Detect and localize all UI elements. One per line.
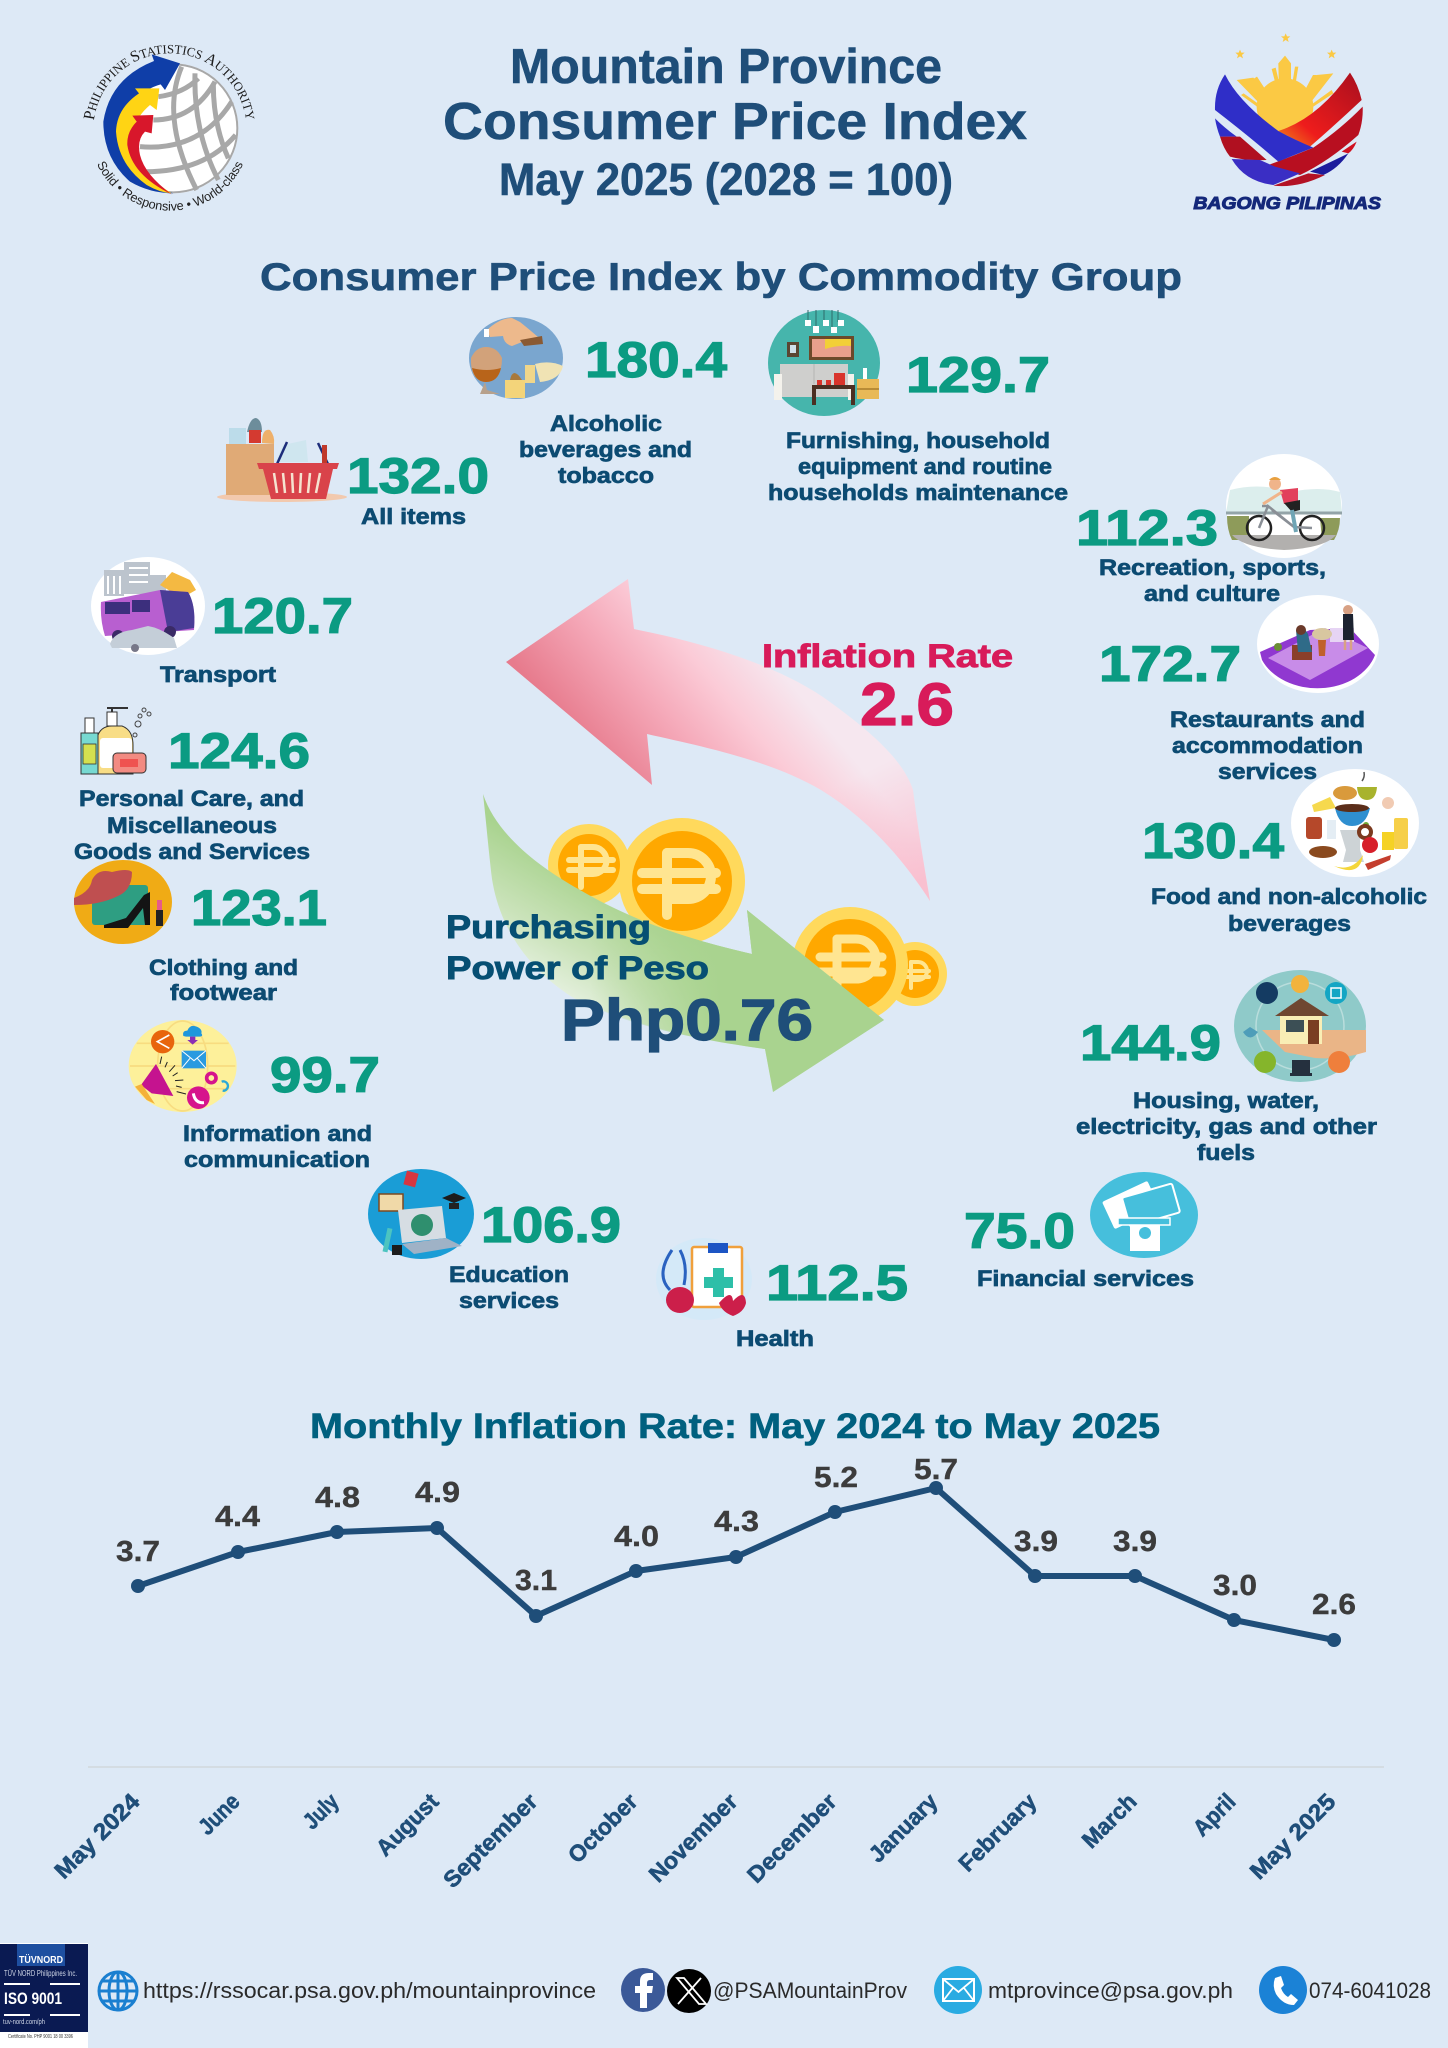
month axis labels: May 2024: [49, 1788, 145, 1884]
value: 130.4: [1142, 813, 1284, 869]
footer: email: [934, 1966, 1233, 2014]
month axis labels: October: [563, 1788, 643, 1868]
item: transport: [91, 557, 353, 687]
label: [183, 1121, 372, 1172]
section heading: monthly inflation: Monthly Inflation Rate: May 2024 to May 2025: [310, 1407, 1160, 1446]
value: 120.7: [212, 588, 353, 644]
icon: telephone: [1259, 1966, 1307, 2014]
month axis labels: May 2025: [1244, 1788, 1341, 1884]
footer: website: https://rssocar.psa.gov.ph/mountainprovince: [143, 1978, 596, 2003]
value: 144.9: [1080, 1015, 1221, 1071]
label: beverages: [1228, 911, 1351, 936]
logo: Philippine Statistics Authority: PHILIPPINE STATISTICS AUTHORITY: [84, 44, 254, 120]
arrow: inflation (pink): [506, 579, 930, 901]
icon: cyclist: [1226, 454, 1342, 558]
label: Alcoholic: [550, 411, 662, 436]
data labels: 4.4: [215, 1501, 260, 1533]
badge: ISO 9001 certification: Certificate No. PHP 9001 18 00 3396: [8, 2034, 73, 2040]
icon: clipboard, apple and heart: [656, 1238, 752, 1320]
item: furnishing: [768, 310, 1068, 505]
data labels: 4.9: [415, 1477, 460, 1509]
month axis labels: April: [1188, 1788, 1241, 1841]
item: clothing: [74, 860, 327, 1005]
label: Recreation, sports,: [1099, 555, 1326, 580]
label: electricity, gas and other: [1076, 1114, 1377, 1139]
month axis labels: November: [644, 1788, 743, 1887]
label: [1170, 707, 1365, 784]
label: Financial services: [977, 1266, 1194, 1291]
purchasing power of peso: Purchasing: [446, 909, 651, 945]
item: restaurants: [1099, 595, 1379, 784]
icon: grocery basket: [217, 418, 347, 502]
label: Miscellaneous: [107, 813, 277, 838]
icon: hat, bag and heel: [74, 860, 172, 944]
inflation rate: Inflation Rate: [762, 638, 1013, 674]
title: Mountain Province: [510, 40, 942, 94]
badge: ISO 9001 certification: tuv-nord.com/ph: [3, 2019, 45, 2026]
label: Food and non-alcoholic: [1151, 884, 1427, 909]
icon: facebook: [621, 1968, 665, 2012]
coins: large right: [792, 907, 908, 1023]
month axis labels: June: [193, 1788, 245, 1840]
logo: Bagong Pilipinas: BAGONG PILIPINAS: [1193, 193, 1381, 213]
icon: bus and car: [91, 557, 205, 655]
data labels: 5.7: [914, 1454, 958, 1486]
item: food: [1142, 769, 1427, 936]
footer: phone: [1259, 1966, 1431, 2014]
icon: restaurant on phone: [1257, 595, 1379, 693]
icon: house on hand: [1234, 970, 1366, 1082]
inflation rate: 2.6: [860, 671, 954, 738]
title: Consumer Price Index: [443, 93, 1027, 151]
icon: envelope: [934, 1966, 982, 2014]
label: Furnishing, household: [786, 428, 1050, 453]
icon: laptop and graduation: [368, 1169, 474, 1259]
coins: small left: [548, 824, 630, 906]
data labels: 3.0: [1213, 1570, 1257, 1602]
value: 99.7: [270, 1047, 380, 1103]
label: Transport: [160, 662, 277, 687]
label: footwear: [170, 980, 277, 1005]
purchasing power of peso: Power of Peso: [446, 950, 709, 986]
label: and culture: [1144, 581, 1280, 606]
value: 75.0: [964, 1203, 1075, 1259]
icon: food circle: [1291, 769, 1419, 877]
label: [1076, 1088, 1377, 1165]
item: personal care: [74, 708, 310, 864]
data labels: 3.1: [515, 1565, 557, 1597]
data labels: 3.9: [1113, 1526, 1157, 1558]
label: Education: [449, 1262, 569, 1287]
value: 180.4: [585, 332, 727, 388]
value: 124.6: [168, 723, 310, 779]
icon: living room: [768, 310, 880, 416]
icon: globe: [99, 1972, 137, 2010]
label: [149, 955, 298, 1005]
footer: website: [99, 1972, 596, 2010]
label: All items: [361, 504, 466, 529]
data labels: 3.9: [1014, 1526, 1058, 1558]
section heading: commodity group: Consumer Price Index by Commodity Group: [260, 256, 1182, 299]
item: alcoholic beverages and tobacco: [469, 317, 727, 488]
month axis labels: January: [863, 1788, 943, 1867]
label: services: [1218, 759, 1317, 784]
label: [449, 1262, 569, 1313]
item: education: [368, 1169, 621, 1313]
data labels: [116, 1454, 1356, 1621]
value: 129.7: [906, 347, 1050, 403]
icon: communication symbols: [129, 1020, 237, 1112]
month axis labels: March: [1076, 1788, 1142, 1853]
month axis labels: February: [953, 1788, 1042, 1877]
data labels: 2.6: [1312, 1589, 1356, 1621]
label: fuels: [1197, 1140, 1255, 1165]
data labels: 4.3: [714, 1506, 759, 1538]
coins: large left: [619, 818, 745, 944]
footer: social media: [621, 1968, 907, 2013]
label: Housing, water,: [1133, 1088, 1319, 1113]
purchasing power of peso: Php0.76: [561, 988, 813, 1053]
icon: soap and bottles: [81, 708, 151, 774]
logo: Bagong Pilipinas: [1193, 33, 1381, 213]
data labels: 4.8: [315, 1482, 360, 1514]
badge: ISO 9001 certification: [0, 1943, 88, 2048]
value: 123.1: [191, 880, 327, 936]
data labels: 5.2: [814, 1462, 858, 1494]
inflation rate: [762, 638, 1013, 738]
label: accommodation: [1172, 733, 1363, 758]
item: information and communication: [129, 1020, 380, 1172]
footer: social media: @PSAMountainProv: [713, 1978, 907, 2003]
label: [1099, 555, 1326, 606]
label: households maintenance: [768, 480, 1068, 505]
title: May 2025 (2028 = 100): [499, 154, 953, 205]
label: [768, 428, 1068, 505]
data line: [138, 1488, 1334, 1640]
item: financial services: [964, 1172, 1198, 1291]
label: Personal Care, and: [79, 786, 304, 811]
label: Restaurants and: [1170, 707, 1365, 732]
label: [1151, 884, 1427, 936]
data labels: 3.7: [116, 1536, 160, 1568]
label: Information and: [183, 1121, 372, 1146]
value: 112.3: [1076, 500, 1218, 556]
purchasing power of peso: [446, 909, 813, 1053]
item: housing: [1076, 970, 1377, 1165]
logo: Philippine Statistics Authority: [84, 44, 254, 211]
data labels: 4.0: [614, 1521, 659, 1553]
arrow: purchasing power (green): [483, 794, 884, 1092]
badge: ISO 9001 certification: TÜV NORD Philippines Inc.: [4, 1969, 77, 1978]
label: services: [459, 1288, 559, 1313]
line chart: monthly inflation rate: [49, 1454, 1384, 1893]
month axis labels: [49, 1788, 1341, 1893]
footer: email: mtprovince@psa.gov.ph: [988, 1978, 1233, 2003]
label: [519, 411, 692, 488]
coins: small right: [883, 942, 947, 1006]
item: health: [656, 1238, 908, 1351]
label: tobacco: [558, 463, 654, 488]
month axis labels: September: [438, 1788, 543, 1893]
item: recreation: [1076, 454, 1342, 606]
badge: ISO 9001 certification: ISO 9001: [4, 1989, 62, 2008]
badge: ISO 9001 certification: TÜVNORD: [19, 1953, 63, 1966]
value: 106.9: [481, 1197, 621, 1253]
icon: X: [667, 1969, 711, 2013]
label: beverages and: [519, 437, 692, 462]
label: Clothing and: [149, 955, 298, 980]
month axis labels: August: [371, 1788, 444, 1861]
label: Health: [736, 1326, 814, 1351]
footer: phone: 074-6041028: [1309, 1978, 1431, 2003]
label: communication: [184, 1147, 370, 1172]
icon: glass, cigar and lighter: [469, 317, 563, 399]
logo: Philippine Statistics Authority: Solid • Responsive • World-class: [98, 162, 242, 211]
value: 112.5: [766, 1255, 908, 1311]
month axis labels: July: [298, 1788, 344, 1834]
data markers: [131, 1481, 1341, 1647]
value: 132.0: [347, 448, 489, 504]
title: [443, 40, 1027, 205]
label: [74, 786, 310, 864]
label: Goods and Services: [74, 839, 310, 864]
month axis labels: December: [742, 1788, 842, 1888]
item: all items: [217, 418, 489, 529]
icon: cards and cash: [1090, 1172, 1198, 1258]
label: equipment and routine: [798, 454, 1052, 479]
value: 172.7: [1099, 636, 1241, 692]
